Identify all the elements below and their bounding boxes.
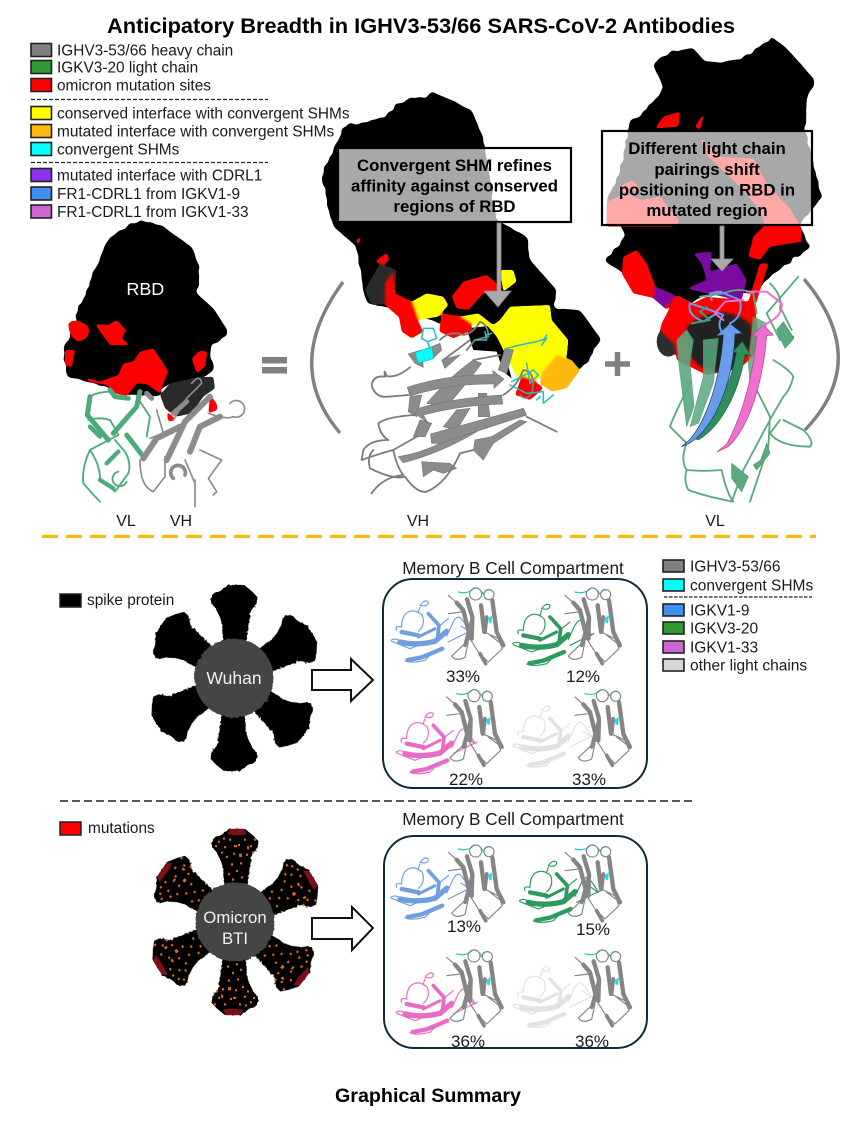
- legend item: IGKV1-9: [663, 602, 749, 620]
- callout: convergent SHM: Convergent SHM refines: [357, 156, 552, 175]
- percent IGKV3-20: 15%: [576, 920, 610, 939]
- virus: Omicron BTI: BTI: [222, 929, 248, 948]
- panel: light chain view: [603, 37, 822, 502]
- legend item: IGHV3-53/66: IGHV3-53/66: [690, 558, 780, 576]
- VL ribbon: [83, 390, 150, 502]
- arrow: Omicron to compartment: [312, 907, 373, 950]
- right parenthesis: [804, 279, 838, 430]
- callout: convergent SHM: regions of RBD: [393, 197, 516, 216]
- virus: Wuhan: [143, 585, 325, 771]
- virus: Omicron BTI: Omicron: [203, 908, 267, 927]
- legend: spike protein: spike protein: [87, 592, 174, 609]
- callout: light chain pairings: positioning on RBD in: [619, 180, 795, 200]
- equals sign: [262, 357, 287, 374]
- Fab: other light chains: [513, 689, 630, 767]
- label: VL left: VL: [116, 513, 136, 530]
- callout: light chain pairings: Different light chain: [628, 139, 786, 158]
- label: VH centre: VH: [407, 513, 429, 530]
- label: VH left: VH: [170, 513, 192, 530]
- legend item: IGKV1-9: FR1-CDRL1 from IGKV1-9: [57, 186, 240, 203]
- legend item: IGKV1-33: IGKV1-33: [690, 640, 758, 656]
- legend: structure colours: [31, 42, 350, 221]
- legend item: mutation sites: omicron mutation sites: [57, 78, 211, 94]
- legend item: mutated interface: mutated interface with convergent SHMs: [57, 124, 334, 140]
- percent IGKV1-9: 13%: [447, 917, 481, 936]
- VH ribbon with convergent SHMs: [362, 322, 557, 493]
- arrow: Wuhan to compartment: [312, 659, 373, 701]
- legend item: IGKV1-33: FR1-CDRL1 from IGKV1-33: [57, 204, 249, 221]
- legend item: convergent SHMs: convergent SHMs: [57, 142, 180, 158]
- left parenthesis: [312, 282, 343, 433]
- RBD surface: [322, 93, 602, 400]
- legend item: light chain: IGKV3-20 light chain: [57, 60, 198, 76]
- VL ribbon with FR1-CDRL1 segments: [670, 277, 811, 502]
- virus: Omicron BTI: [144, 829, 326, 1015]
- legend item: CDRL1 interface: mutated interface with CDRL1: [57, 168, 262, 184]
- percent IGKV1-33: 36%: [451, 1032, 485, 1051]
- legend item: heavy chain: IGHV3-53/66 heavy chain: [57, 42, 233, 60]
- panel: memory compartment Omicron: [384, 836, 647, 1051]
- Fab: IGKV3-20: [513, 588, 620, 665]
- Fab: IGKV1-9: [391, 845, 503, 921]
- Fab: other light chains: [513, 950, 630, 1027]
- arrow: callout to mutated region: [711, 226, 733, 271]
- arrow: callout to conserved region: [484, 223, 511, 307]
- legend item: convergent SHMs: convergent SHMs: [690, 578, 813, 594]
- virus: Wuhan: Wuhan: [206, 668, 262, 688]
- RBD surface: [63, 220, 228, 422]
- heading: memory compartment 1: Memory B Cell Compartment: [402, 558, 624, 578]
- legend item: IGKV3-20: IGKV3-20: [690, 620, 758, 638]
- RBD label: RBD: [126, 279, 164, 299]
- legend item: conserved interface: conserved interface with convergent SHMs: [57, 106, 350, 122]
- percent IGKV1-33: 22%: [449, 770, 483, 789]
- percent IGKV1-9: 33%: [446, 667, 480, 686]
- legend item: IGKV1-9: IGKV1-9: [690, 602, 749, 620]
- callout: light chain pairings: mutated region: [646, 201, 768, 220]
- percent other: 33%: [572, 770, 606, 789]
- percent IGKV3-20: 12%: [566, 667, 600, 686]
- Fab: IGKV1-9: [391, 588, 503, 664]
- Fab: IGKV1-33: [396, 689, 502, 774]
- Fab: IGKV3-20: [519, 845, 620, 922]
- panel: memory compartment Wuhan: [383, 579, 647, 789]
- callout: convergent SHM: [338, 148, 571, 222]
- callout: convergent SHM: affinity against conserved: [351, 176, 558, 196]
- plus sign: [605, 352, 630, 376]
- legend item: other light chains: other light chains: [690, 658, 807, 674]
- caption: graphical summary: Graphical Summary: [335, 1085, 521, 1107]
- callout: light chain pairings: pairings shift: [654, 160, 760, 179]
- RBD surface: [603, 37, 822, 375]
- percent other: 36%: [575, 1032, 609, 1051]
- panel: heavy chain view: [322, 93, 602, 493]
- legend: mutations: mutations: [88, 820, 155, 837]
- panel: overall Fab bound to RBD: [63, 220, 245, 507]
- callout: light chain pairings: [602, 131, 812, 225]
- VH ribbon: [140, 378, 245, 507]
- heading: memory compartment 2: Memory B Cell Compartment: [402, 809, 624, 829]
- label: VL right: VL: [705, 513, 725, 530]
- legend: memory compartment colours: [663, 558, 813, 674]
- Fab: IGKV1-33: [396, 950, 502, 1034]
- title: Anticipatory Breadth in IGHV3-53/66 SARS-CoV-2 Antibodies: [107, 15, 735, 38]
